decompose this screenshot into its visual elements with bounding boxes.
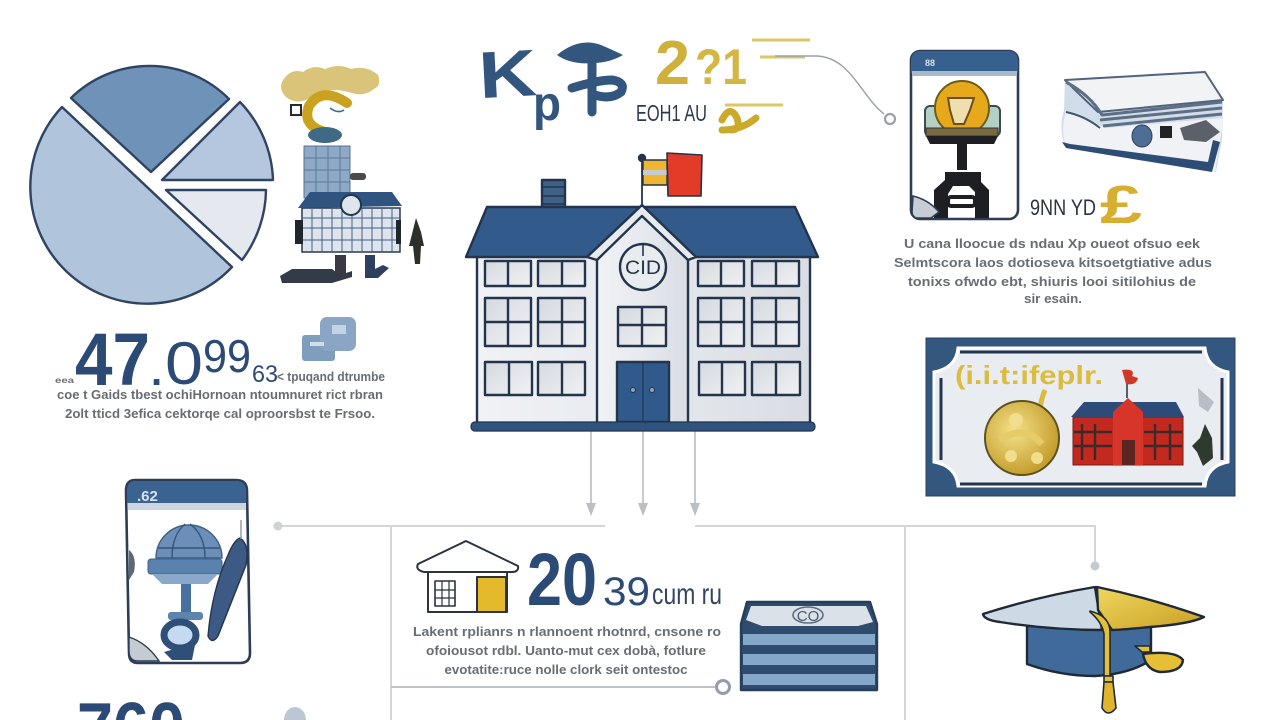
icon: bank building with currency symbol (280, 66, 424, 283)
title: K (477, 35, 539, 112)
connector: title to right panel (775, 56, 895, 124)
phone card: dome and pen (126, 480, 250, 663)
school building: CID (625, 258, 661, 279)
banknote gold lettering: (i.i.t:ifeplr. (955, 360, 1103, 390)
banknote panel (926, 338, 1235, 496)
flag (639, 153, 702, 205)
title: EOH1 AU (636, 100, 707, 126)
title: ?1 (695, 39, 747, 95)
chimney (542, 180, 565, 212)
label: right panel heading with pound sign (1030, 175, 1142, 235)
statistic: left 47.0 figure: 99 (203, 330, 251, 382)
arrows from school (586, 418, 700, 516)
statistic: left 47.0 figure: 0 (165, 330, 203, 397)
text block: right description (894, 237, 1212, 306)
text block: left description (55, 370, 385, 421)
statistic: left 47.0 figure (75, 318, 278, 401)
statistic: left 47.0 figure: 47 (75, 318, 150, 401)
statistic: 20 39 (527, 538, 722, 621)
text block: right description: Selmtscora laos dotioseva kitsoetgtiative adus (894, 256, 1212, 270)
text block: left description: eea (55, 376, 75, 385)
statistic: 20 39: 39 (603, 570, 650, 614)
banknote red school (1071, 370, 1184, 465)
title: p (533, 78, 561, 131)
phone card: dome and pen: .62 (137, 488, 158, 505)
icon: stack of cash: CO (797, 608, 819, 625)
windows (485, 261, 800, 395)
statistic: left 47.0 figure: 63 (252, 361, 278, 388)
text block: centre description: evotatite:ruce nolle clork seit ontestoc (444, 663, 688, 677)
text block: right description: U cana lloocue ds ndau Xp oueot ofsuo eek (904, 237, 1200, 251)
label: right panel heading with pound sign: 9NN YD (1030, 195, 1096, 220)
connector lines (274, 522, 1100, 720)
statistic: left 47.0 figure: . (151, 350, 162, 394)
banknote coin (985, 401, 1059, 475)
phone card: coin on stand: 88 (925, 58, 935, 68)
icon: stack of cash (741, 602, 877, 690)
icon: blue banknotes (302, 317, 356, 361)
phone card: coin on stand (911, 51, 1018, 219)
text block: right description: sir esain. (1024, 292, 1082, 306)
text block: left description: coe t Gaids tbest ochiHornoan ntoumnuret rict rbran (57, 388, 383, 402)
icon: graduation cap (983, 587, 1204, 713)
text block: left description: 2olt tticd 3efica cektorqe cal oproorsbst te Frsoo. (65, 407, 375, 421)
text block: centre description (413, 625, 721, 677)
title: 2 (655, 29, 690, 98)
school building (466, 153, 818, 431)
text block: centre description: Lakent rplianrs n rlannoent rhotnrd, cnsone ro (413, 625, 721, 639)
text block: right description: tonixs ofwdo ebt, shiuris looi sitilohius de (908, 275, 1196, 289)
icon: small house (417, 541, 518, 612)
icon: money stack top right (1061, 72, 1223, 172)
text block: left description: < tpuqand dtrumbe (277, 370, 385, 384)
door (617, 362, 669, 422)
pie chart (30, 66, 273, 304)
label: right panel heading with pound sign: £ (1100, 175, 1142, 235)
text block: centre description: ofoiousot rdbl. Uanto-mut cex dobà, fotlure (426, 644, 706, 658)
statistic: 20 39: cum ru (652, 578, 722, 611)
statistic: 20 39: 20 (527, 538, 597, 621)
title (477, 29, 810, 131)
